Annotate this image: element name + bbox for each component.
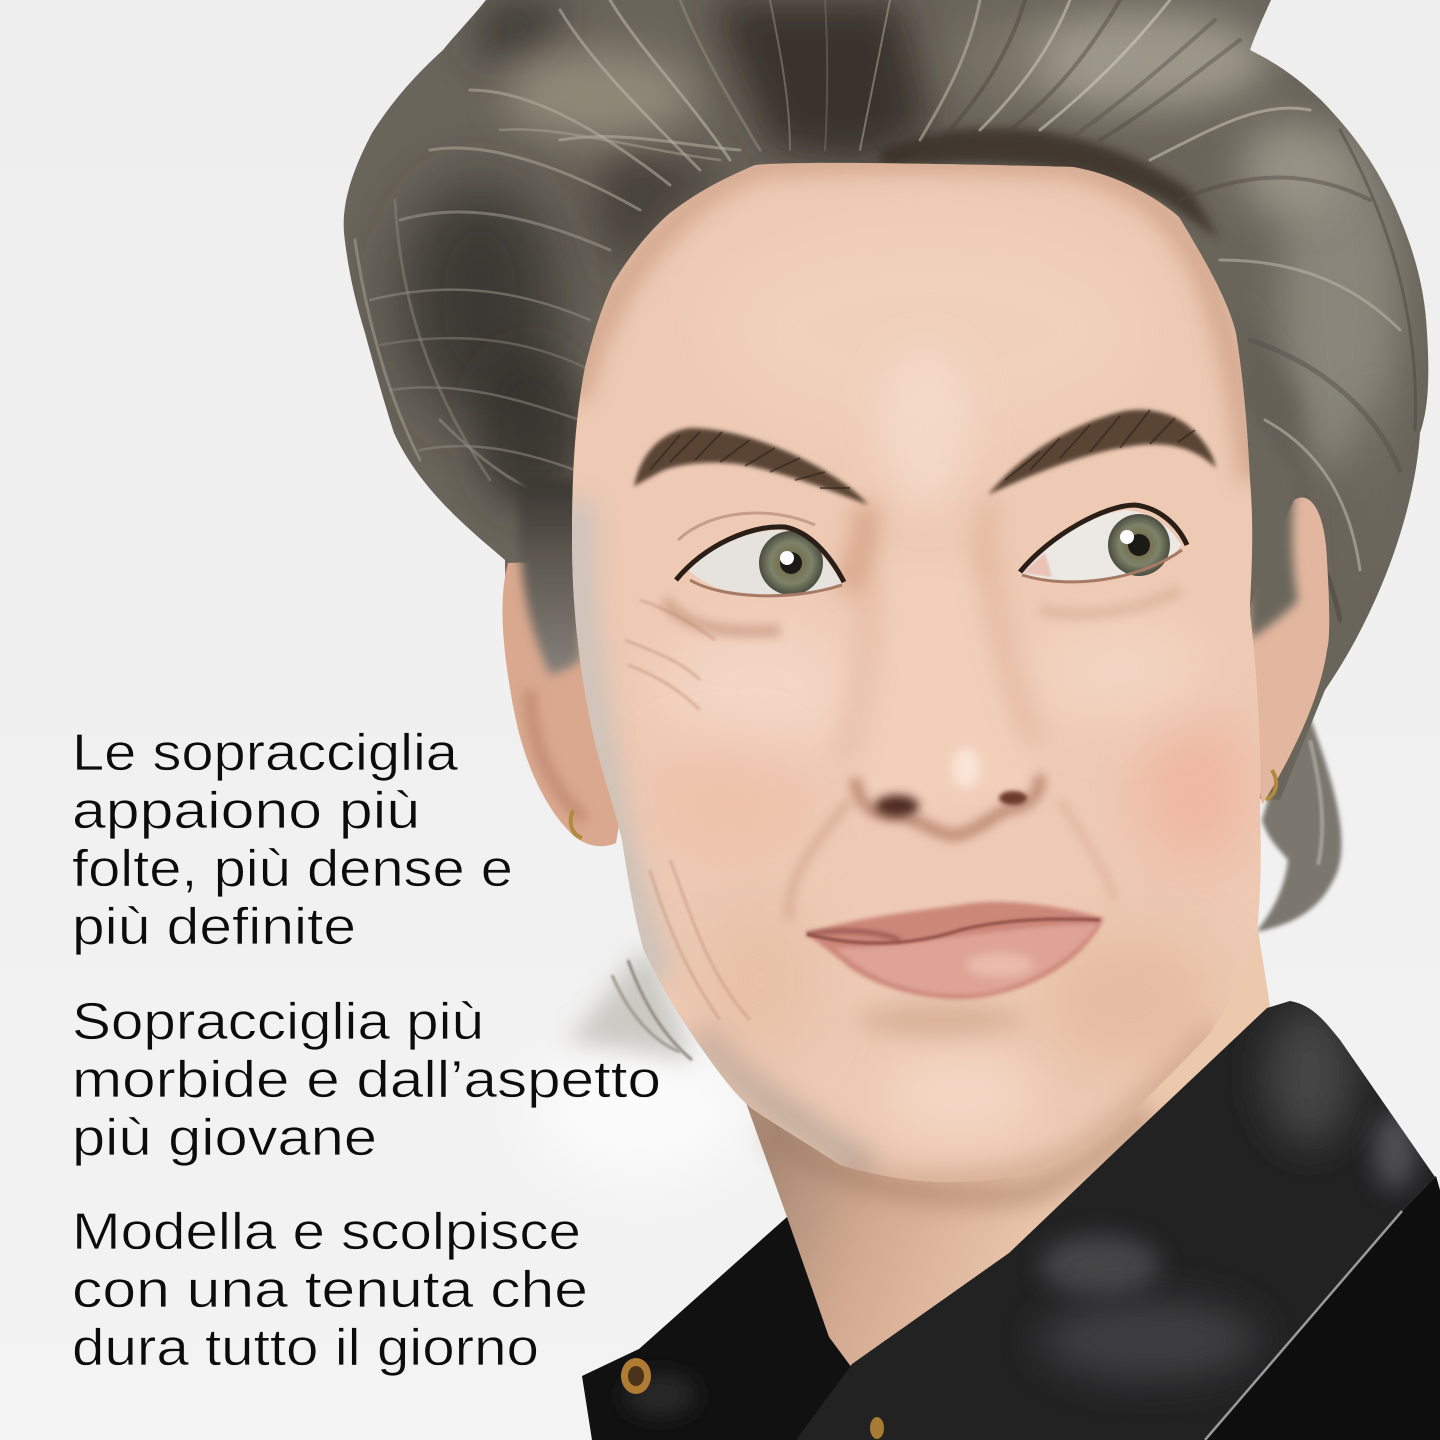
- right eye: [1019, 505, 1187, 582]
- hair tone patches: [400, 0, 1403, 620]
- gold button left: [621, 1358, 651, 1394]
- nasolabial fold: [789, 800, 850, 920]
- text block: all-day hold: con una tenuta che: [72, 1261, 588, 1319]
- jaw grey patch: [700, 1030, 870, 1170]
- neck shadow under chin: [770, 1110, 1150, 1196]
- skin shading: [575, 159, 1252, 1182]
- lips: [807, 902, 1104, 999]
- nose: [845, 560, 1040, 835]
- jacket collar: [796, 1001, 1435, 1440]
- jacket front panel: [1205, 1176, 1440, 1440]
- right eyebrow: [988, 410, 1216, 495]
- cheek right light: [1050, 627, 1194, 720]
- right hair strip: [1240, 400, 1298, 640]
- chin highlight: [898, 1058, 1026, 1132]
- nostril left: [875, 795, 919, 817]
- left hair wisps: [565, 950, 692, 1062]
- text block: softer brows: [72, 993, 661, 1167]
- left earring: [571, 810, 582, 838]
- chin lower shadow: [840, 1030, 1215, 1182]
- collar seam: [1205, 1211, 1402, 1440]
- cheek left blush: [694, 748, 776, 818]
- hair mass: [344, 0, 1428, 800]
- text block: fuller brows: più definite: [72, 898, 356, 956]
- hairline shadow: [575, 159, 1252, 480]
- left lower cheek tone: [715, 922, 805, 1038]
- text block: softer brows: più giovane: [72, 1109, 377, 1167]
- forehead centre highlight: [881, 362, 969, 506]
- right eye socket shadow: [1040, 590, 1180, 614]
- left eye socket shadow: [665, 600, 780, 631]
- face: [572, 159, 1261, 1182]
- right hair wisp: [1256, 690, 1342, 932]
- text block: all-day hold: Modella e scolpisce: [72, 1203, 581, 1261]
- right jaw tone: [1040, 930, 1220, 1070]
- grey edge light: [578, 500, 660, 980]
- jacket left side: [582, 1217, 852, 1440]
- text block: fuller brows: Le sopracciglia: [72, 724, 458, 782]
- text block: fuller brows: [72, 724, 513, 956]
- left shoulder sheen: [624, 1375, 696, 1415]
- left hair strip: [518, 480, 590, 675]
- nostril right: [999, 791, 1027, 805]
- under lip shadow: [855, 1004, 1025, 1036]
- hair strands: [355, 0, 1416, 620]
- left eye: [676, 513, 844, 597]
- cheek right blush: [1140, 715, 1250, 865]
- text block: softer brows: Sopracciglia più: [72, 993, 484, 1051]
- cheek left highlight: [668, 625, 847, 749]
- right ear: [1240, 400, 1329, 805]
- forehead tone: [710, 220, 1150, 440]
- neck: [745, 930, 1270, 1374]
- left eyebrow: [634, 428, 868, 505]
- nose bridge shadows: [845, 500, 990, 590]
- left ear: [502, 480, 640, 846]
- text block: fuller brows: appaiono più: [72, 782, 420, 840]
- text block: all-day hold: [72, 1203, 588, 1377]
- text block: all-day hold: dura tutto il giorno: [72, 1319, 539, 1377]
- background glow: [530, 1040, 750, 1180]
- text block: fuller brows: folte, più dense e: [72, 840, 513, 898]
- collar highlights: [1040, 1005, 1417, 1380]
- portrait photo: [344, 0, 1440, 1440]
- nasolabial fold right: [1060, 800, 1115, 900]
- right eye corner: [1022, 553, 1052, 577]
- right earring: [1266, 770, 1276, 800]
- jacket: [582, 1001, 1440, 1440]
- under-eye wrinkles: [625, 600, 750, 1020]
- gold button bottom: [870, 1417, 884, 1439]
- text block: softer brows: morbide e dall’aspetto: [72, 1051, 661, 1109]
